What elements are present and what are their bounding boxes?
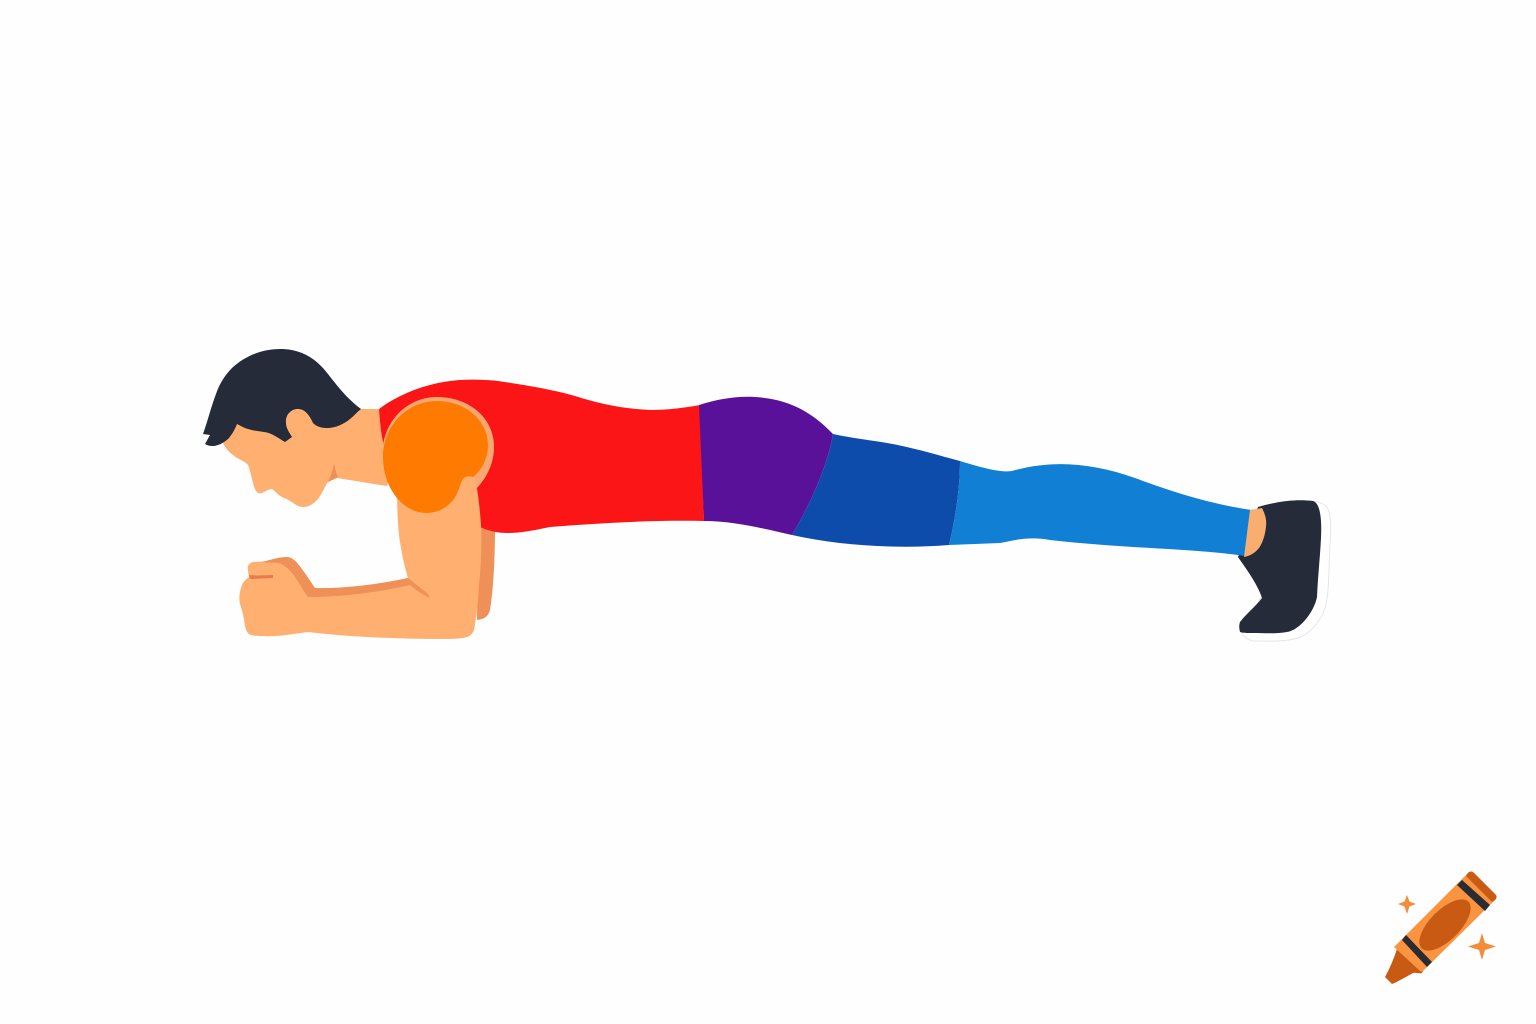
- forearm crease: [262, 557, 430, 598]
- crayon body: [1394, 872, 1496, 972]
- crayon stripe top: [1457, 880, 1490, 911]
- crayon label oval: [1411, 891, 1479, 959]
- crayon stripe bottom: [1402, 935, 1432, 967]
- icon: orange crayon logo: [1385, 872, 1496, 984]
- finger line: [249, 575, 273, 579]
- neck shadow: [328, 463, 338, 482]
- far arm shadow: [477, 520, 495, 620]
- shoe outline: [1242, 501, 1331, 641]
- figure: plank: [203, 349, 1331, 641]
- crayon cap: [1466, 872, 1496, 902]
- hips: purple shorts: [699, 397, 833, 535]
- shoe: [1238, 500, 1321, 633]
- shoulder: orange deltoid: [383, 401, 488, 513]
- thigh: dark blue: [792, 434, 960, 547]
- ear: [286, 409, 313, 440]
- ankle: [1244, 508, 1266, 557]
- sparkle left: [1398, 895, 1416, 914]
- calf: light blue: [949, 461, 1252, 556]
- shoulder highlight ring: [383, 397, 494, 488]
- upper arm and forearm: [239, 474, 481, 639]
- torso: red shirt: [379, 380, 704, 533]
- sparkle right: [1468, 933, 1496, 960]
- hair: [203, 349, 361, 446]
- head and neck skin: [223, 409, 400, 507]
- crayon tip: [1385, 949, 1426, 984]
